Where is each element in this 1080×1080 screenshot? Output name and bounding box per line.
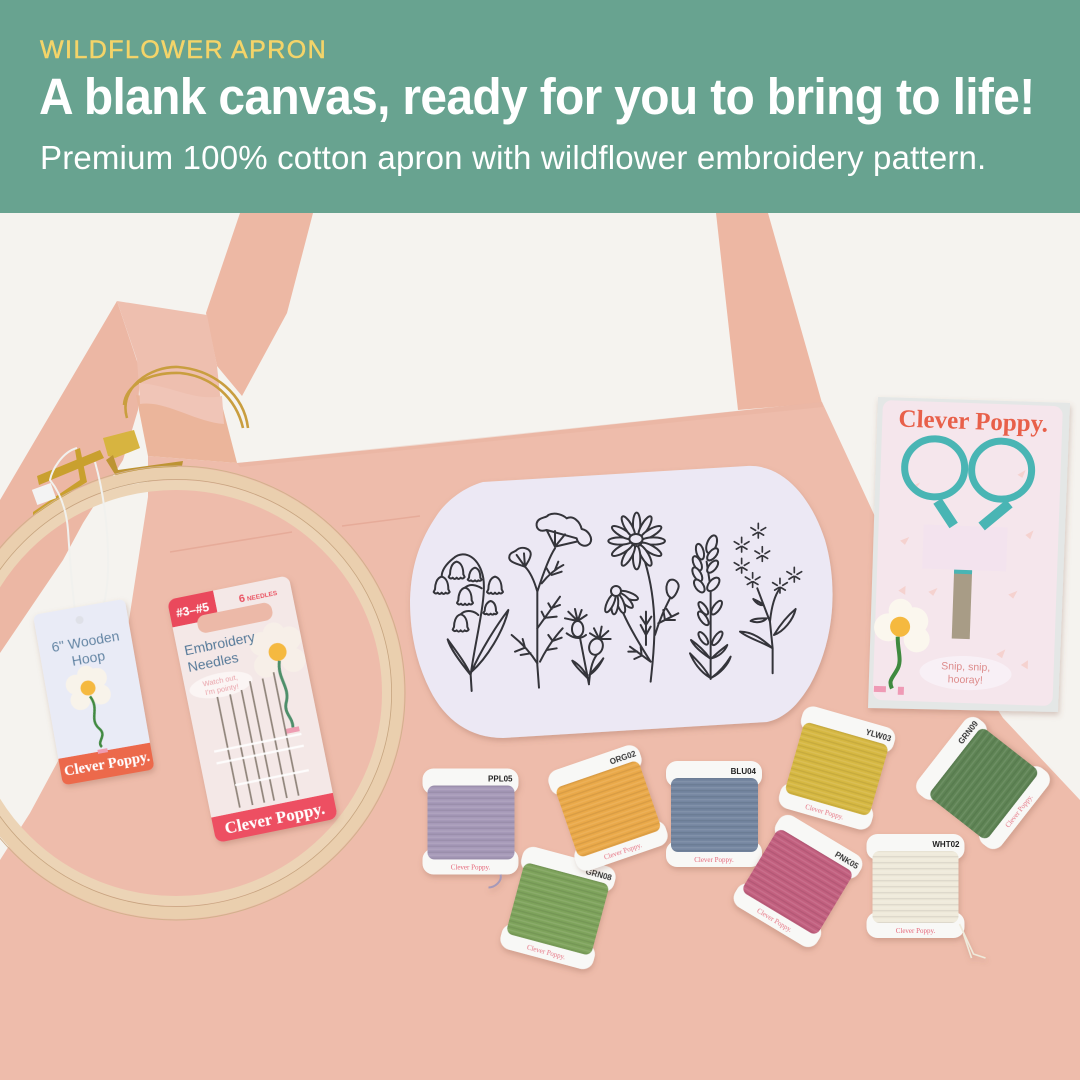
thread bobbin: BLU04: Clever Poppy. — [694, 856, 734, 864]
star flowers — [734, 523, 802, 673]
thread bobbin: YLW03 — [776, 704, 898, 832]
thread bobbin: WHT02: WHT02 — [932, 840, 960, 849]
tag string — [50, 448, 108, 623]
umbel flower — [509, 514, 591, 688]
hoop tag: Clever Poppy. — [63, 749, 151, 780]
thread bobbin: ORG02 — [545, 742, 671, 874]
thread bobbin: WHT02: Clever Poppy. — [896, 927, 936, 935]
long strap — [0, 301, 140, 653]
speech bubble: Snip, snip, — [941, 660, 990, 674]
plastic sleeve — [868, 397, 1070, 712]
thread bobbin: PPL05: Clever Poppy. — [451, 864, 491, 872]
brand strip — [211, 793, 338, 843]
fabric loop — [139, 383, 224, 424]
speech bubble: Watch out, — [202, 673, 238, 688]
size badge — [167, 591, 219, 627]
speech bubble — [919, 654, 1012, 692]
wildflower line drawing — [434, 513, 802, 691]
thistles — [565, 609, 611, 684]
icon: teal scissor handles — [903, 438, 1033, 528]
hoop tag: Hoop — [70, 647, 106, 669]
speech bubble: I'm pointy! — [204, 682, 239, 697]
thread bobbin: WHT02 — [866, 834, 986, 958]
tag brand strip — [58, 743, 155, 785]
size badge: #3–#5 — [175, 600, 211, 620]
left neck strap — [206, 213, 313, 396]
right neck strap — [716, 213, 822, 410]
pink leaf pattern — [896, 466, 1036, 669]
tag title: 6" Wooden — [50, 627, 121, 655]
thread bobbin: ORG02: Clever Poppy. — [603, 841, 643, 862]
needles — [215, 672, 299, 808]
needle count: 6 NEEDLES — [238, 586, 279, 606]
embroidery patch — [410, 466, 833, 738]
thread bobbin: YLW03: YLW03 — [865, 728, 893, 744]
needles card: Clever Poppy. — [223, 799, 326, 838]
thread bobbin: GRN08: Clever Poppy. — [526, 943, 566, 961]
lavender — [690, 534, 731, 679]
thread bobbin: PPL05 — [422, 768, 518, 888]
needles card — [167, 575, 338, 843]
thread bobbin: ORG02: ORG02 — [609, 749, 638, 767]
scissors card — [868, 397, 1070, 712]
subheading: Premium 100% cotton apron with wildflower embroidery pattern. — [40, 139, 986, 176]
thread bobbin: BLU04: BLU04 — [731, 767, 757, 776]
apron body — [0, 402, 1080, 1080]
thread bobbin: BLU04 — [666, 761, 762, 867]
thread bobbin: PNK05 — [730, 811, 866, 951]
scissor blades — [952, 569, 972, 639]
speech bubble: hooray! — [948, 673, 983, 687]
thread bobbin: PNK05: Clever Poppy. — [755, 907, 794, 934]
hoop tag — [33, 599, 155, 785]
thread bobbin: GRN09: Clever Poppy. — [1004, 793, 1035, 829]
card slot band — [922, 524, 1008, 571]
thread bobbin: YLW03: Clever Poppy. — [804, 803, 845, 822]
thread bobbin: PNK05: PNK05 — [833, 850, 860, 871]
hanging strap — [136, 395, 237, 463]
thread bobbin: GRN08: GRN08 — [585, 867, 613, 883]
needles card: Needles — [186, 649, 240, 675]
flower mascot — [63, 662, 121, 757]
speech bubble — [187, 667, 255, 703]
strap fold — [117, 301, 222, 413]
card title: Embroidery — [183, 628, 256, 658]
thread bobbin: PPL05: PPL05 — [488, 774, 513, 784]
eyebrow: WILDFLOWER APRON — [40, 36, 327, 64]
card brand: Clever Poppy. — [898, 406, 1048, 438]
gold ring — [124, 367, 248, 428]
hoop hardware — [32, 430, 183, 516]
wooden hoop — [0, 466, 405, 920]
thread bobbin: GRN08 — [498, 844, 618, 972]
thread bobbin: GRN09 — [912, 713, 1054, 853]
flower mascot — [246, 617, 319, 738]
thread bobbin: GRN09: GRN09 — [957, 719, 980, 746]
flower mascot — [872, 598, 931, 696]
headline: A blank canvas, ready for you to bring to life! — [39, 68, 1035, 125]
header band — [0, 0, 1080, 213]
daisies — [603, 513, 679, 682]
lily of the valley — [434, 554, 508, 691]
